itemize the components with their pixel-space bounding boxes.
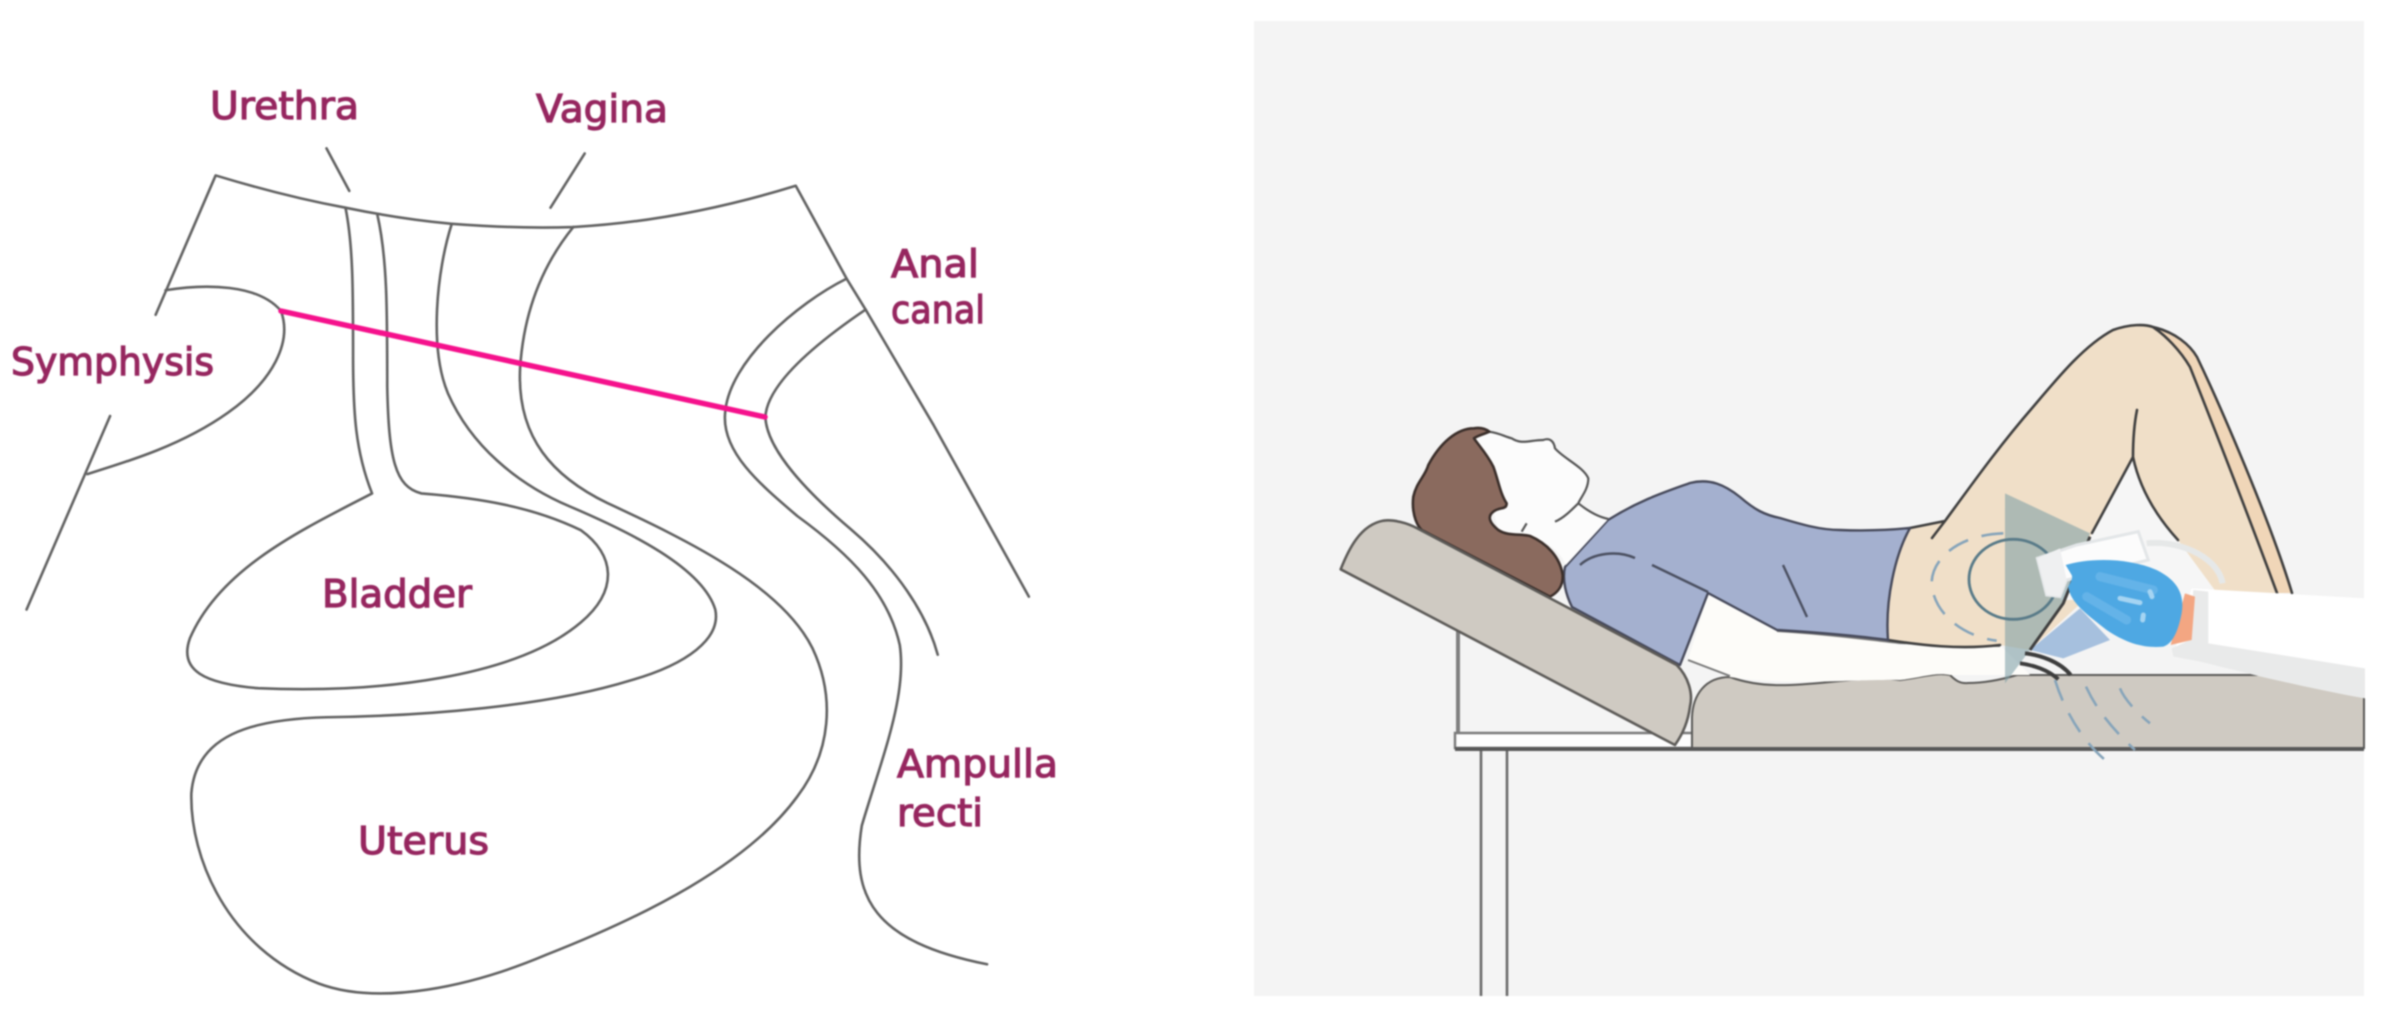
glove fold shading	[2087, 577, 2153, 620]
lower blue beam	[2030, 608, 2110, 658]
label: Anal canal	[891, 242, 985, 332]
hair	[1413, 428, 1563, 597]
symphysis outline	[87, 287, 284, 474]
table upright	[1456, 630, 1460, 733]
pink reference line	[281, 311, 765, 417]
dashed scan wave	[1932, 533, 2003, 641]
probe	[2037, 532, 2148, 597]
head	[1341, 428, 1691, 745]
thigh underside line	[2030, 537, 2090, 650]
label: Bladder: Bladder	[322, 572, 472, 616]
label: Anal canal: Anal	[891, 242, 979, 286]
label: Uterus: Uterus	[358, 819, 489, 863]
label: Ampulla recti: recti	[897, 791, 983, 835]
shin strip	[2153, 327, 2292, 593]
table legs	[1481, 750, 1507, 996]
panel: anatomy diagram	[11, 84, 1058, 993]
wrist	[2171, 593, 2195, 645]
urethra and bladder outline	[187, 208, 608, 689]
table top	[1455, 733, 1695, 748]
label: Ampulla recti: Ampulla	[897, 742, 1058, 786]
urethra leader	[326, 148, 349, 191]
anatomy outlines	[27, 148, 1029, 993]
lower left outline	[27, 416, 110, 610]
back rest cushion	[1341, 520, 1691, 745]
gap between the legs	[2060, 457, 2222, 600]
sleeve shadow	[2172, 590, 2365, 698]
face outline	[1489, 432, 1608, 532]
anal canal inner wall	[765, 310, 938, 655]
outer pelvic outline	[156, 175, 1029, 597]
scan circle	[1969, 539, 2058, 619]
label: Symphysis: Symphysis	[11, 340, 214, 384]
anal canal and ampulla outer wall	[725, 279, 987, 964]
panel: examination illustration	[1254, 21, 2365, 996]
seat cushion	[1692, 674, 2364, 748]
label: Vagina: Vagina	[536, 87, 668, 131]
dashed waves in mattress	[2055, 680, 2150, 763]
glove highlights	[2120, 592, 2152, 620]
sleeve	[2173, 588, 2365, 698]
label: Anal canal: canal	[891, 288, 985, 332]
shirt details	[1580, 554, 1807, 617]
table edge line	[1455, 747, 2364, 751]
glove	[2066, 560, 2182, 647]
probe shade	[2037, 548, 2067, 597]
patient fingers	[2020, 653, 2071, 679]
probe cable	[2147, 543, 2223, 583]
arm	[1688, 595, 2030, 682]
face and neck	[1474, 433, 1608, 565]
label: Ampulla recti	[897, 742, 1058, 835]
panel background	[1254, 21, 2364, 996]
ultrasound probe and hand	[1932, 493, 2365, 763]
leg outlines	[1888, 325, 2292, 647]
arm outline	[1688, 631, 2000, 676]
vagina and uterus outline	[191, 224, 827, 993]
vagina leader	[550, 154, 585, 208]
shirt	[1564, 481, 1910, 665]
scan plane	[2005, 493, 2090, 683]
leg	[1886, 325, 2292, 650]
label: Urethra: Urethra	[210, 84, 359, 128]
